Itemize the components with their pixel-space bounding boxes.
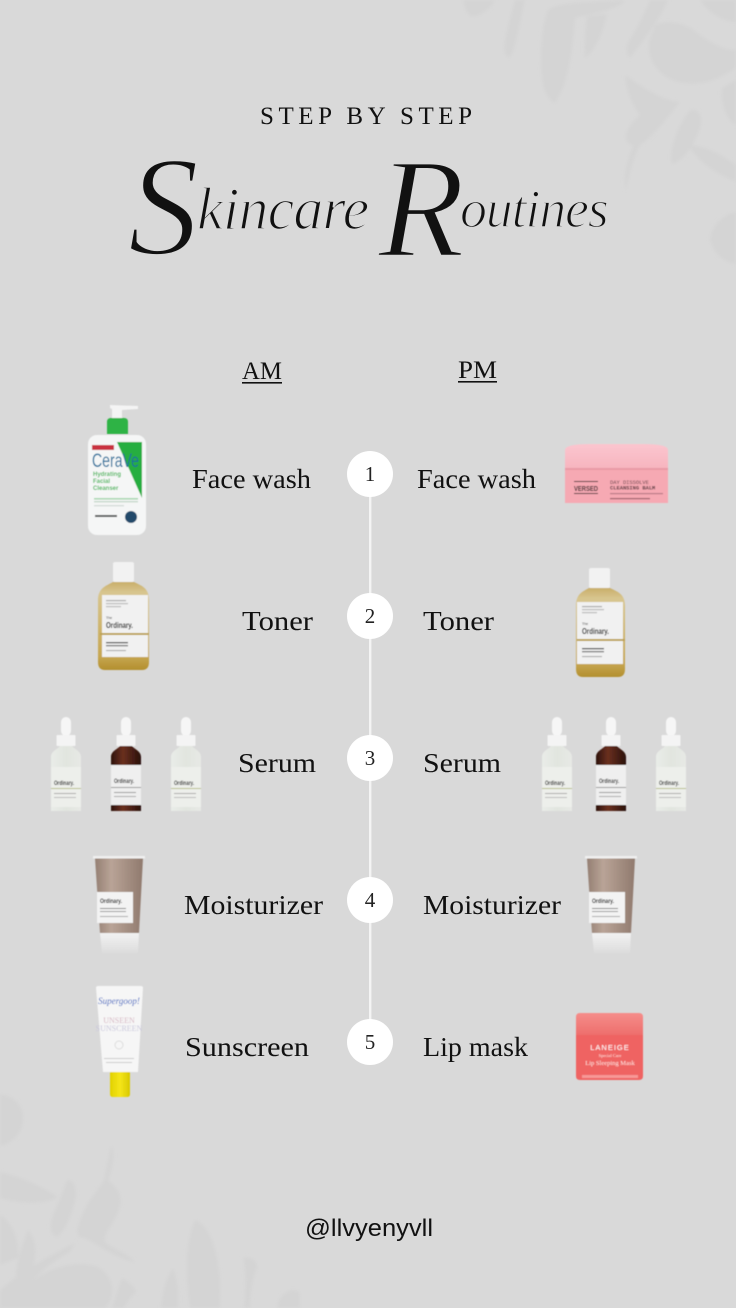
product: Versed cleansing balm: DAY DISSOLVE bbox=[610, 480, 649, 486]
serum bottle AM 2 bbox=[111, 717, 141, 811]
product: The Ordinary moisturizer PM bbox=[585, 856, 637, 953]
column heading: AM: AM bbox=[242, 358, 282, 385]
step 4 marker bbox=[347, 877, 393, 923]
serum bottle AM 1: Ordinary. bbox=[54, 781, 74, 787]
product: The Ordinary toner AM bbox=[98, 562, 149, 670]
product: CeraVe cleanser: Facial bbox=[93, 479, 110, 485]
subtitle: STEP BY STEP bbox=[260, 103, 472, 130]
timeline connector bbox=[369, 474, 371, 1042]
product: CeraVe cleanser: Hydrating bbox=[93, 472, 121, 478]
product: CeraVe cleanser: Cleanser bbox=[93, 486, 119, 492]
serum bottle AM 2: Ordinary. bbox=[114, 779, 134, 785]
AM labels: Serum bbox=[238, 748, 316, 778]
serum bottle PM 2: Ordinary. bbox=[599, 779, 619, 785]
step 1 marker: 1 bbox=[365, 462, 375, 486]
AM labels: Sunscreen bbox=[185, 1032, 310, 1062]
PM labels bbox=[417, 464, 561, 1062]
product: The Ordinary toner PM: The bbox=[582, 622, 588, 626]
serum bottle AM 3 bbox=[171, 717, 201, 811]
decorative leaf shadows: top right bbox=[463, 0, 736, 264]
product: Versed cleansing balm bbox=[565, 444, 668, 503]
product: The Ordinary toner AM: Ordinary. bbox=[106, 620, 133, 630]
product: Laneige lip sleeping mask: Special Care bbox=[599, 1053, 621, 1058]
step 4 marker: 4 bbox=[365, 888, 376, 912]
serum trio PM bbox=[542, 717, 686, 811]
serum bottle PM 3 bbox=[656, 717, 686, 811]
product: Laneige lip sleeping mask: Lip Sleeping Mask bbox=[585, 1060, 635, 1067]
PM labels: Toner bbox=[423, 606, 494, 636]
product: The Ordinary moisturizer AM bbox=[93, 856, 145, 953]
step 1 marker bbox=[347, 451, 393, 497]
serum bottle AM 1 bbox=[51, 717, 81, 811]
product: The Ordinary toner PM bbox=[576, 568, 625, 677]
product: Supergoop sunscreen: SUNSCREEN bbox=[96, 1024, 143, 1033]
decorative leaf shadows: bottom left bbox=[0, 1094, 300, 1308]
step 5 marker: 5 bbox=[365, 1030, 375, 1054]
title: R bbox=[377, 129, 465, 287]
product: CeraVe cleanser bbox=[88, 405, 146, 535]
product: The Ordinary moisturizer PM: Ordinary. bbox=[592, 898, 614, 905]
product: Laneige lip sleeping mask bbox=[576, 1013, 643, 1080]
column heading: PM: PM bbox=[458, 357, 497, 384]
serum bottle PM 1 bbox=[542, 717, 572, 811]
product: Supergoop sunscreen bbox=[96, 986, 143, 1097]
step 2 marker bbox=[347, 593, 393, 639]
step 3 marker: 3 bbox=[365, 746, 375, 770]
product: Supergoop sunscreen: UNSEEN bbox=[103, 1016, 135, 1025]
product: CeraVe cleanser: CeraVe bbox=[92, 451, 139, 472]
PM labels: Lip mask bbox=[423, 1032, 529, 1062]
serum bottle PM 3: Ordinary. bbox=[659, 781, 679, 787]
product: The Ordinary moisturizer AM: Ordinary. bbox=[100, 898, 122, 905]
serum bottle PM 2 bbox=[596, 717, 626, 811]
serum trio AM bbox=[51, 717, 201, 811]
product: The Ordinary toner AM: The bbox=[106, 616, 112, 620]
PM labels: Serum bbox=[423, 748, 501, 778]
AM labels: Toner bbox=[242, 606, 313, 636]
AM labels bbox=[184, 464, 323, 1062]
title: S bbox=[128, 127, 199, 285]
product: Supergoop sunscreen: Supergoop! bbox=[98, 996, 140, 1006]
product: Versed cleansing balm: CLEANSING BALM bbox=[610, 486, 655, 492]
step 3 marker bbox=[347, 735, 393, 781]
product: Versed cleansing balm: VERSED bbox=[574, 486, 598, 493]
title: kincare bbox=[197, 176, 382, 242]
title: outines bbox=[460, 179, 608, 239]
AM labels: Moisturizer bbox=[184, 890, 323, 920]
step 5 marker bbox=[347, 1019, 393, 1065]
serum bottle PM 1: Ordinary. bbox=[545, 781, 565, 787]
product: The Ordinary toner PM: Ordinary. bbox=[582, 626, 609, 636]
social handle: @llvyenyvll bbox=[305, 1215, 433, 1242]
serum bottle AM 3: Ordinary. bbox=[174, 781, 194, 787]
product: Laneige lip sleeping mask: LANEIGE bbox=[590, 1043, 630, 1052]
PM labels: Face wash bbox=[417, 464, 537, 494]
step 2 marker: 2 bbox=[365, 604, 375, 628]
AM labels: Face wash bbox=[192, 464, 312, 494]
PM labels: Moisturizer bbox=[423, 890, 561, 920]
